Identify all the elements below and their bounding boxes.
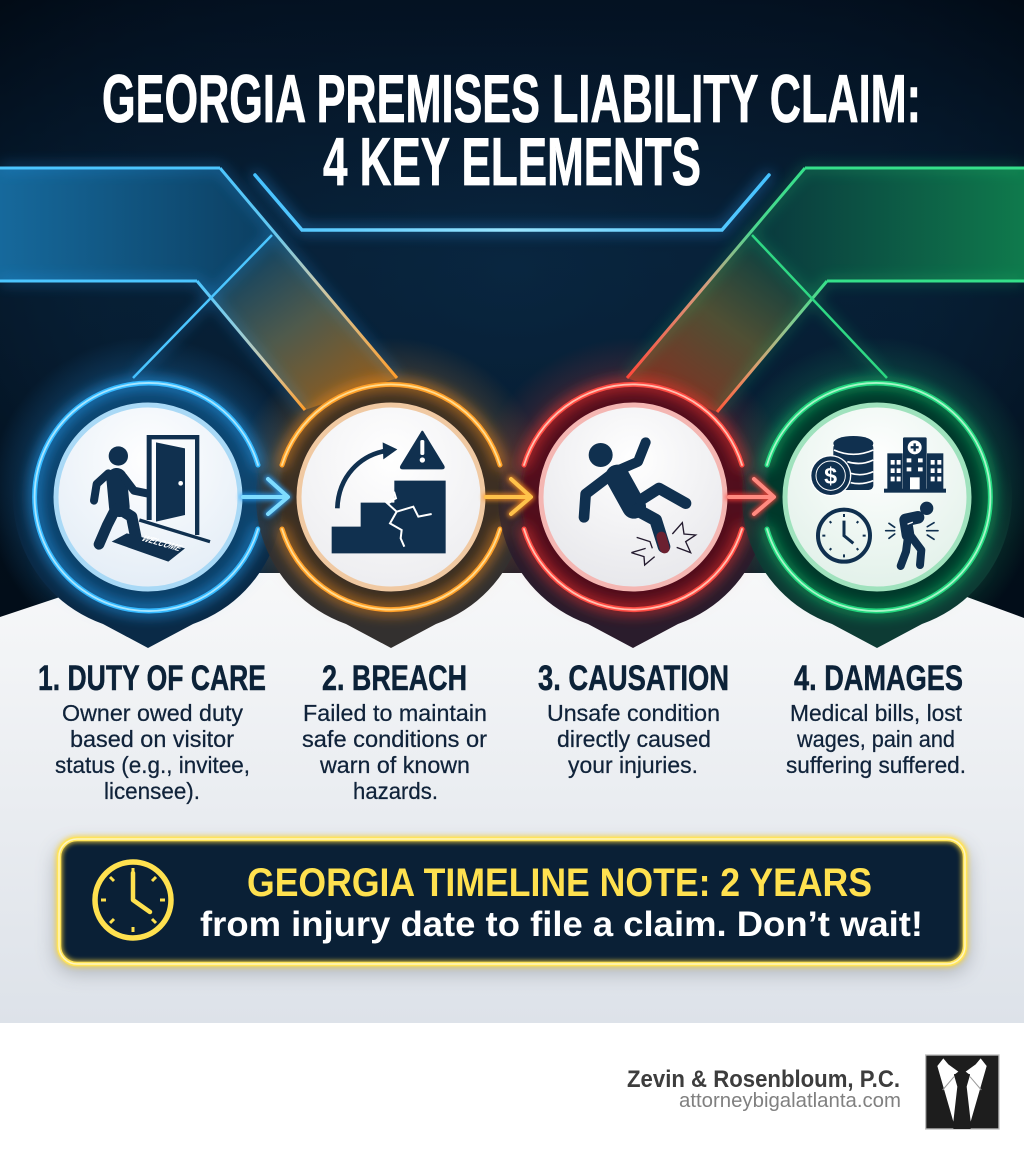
text block: 1 duty of care: 1. DUTY OF CARE — [38, 659, 266, 698]
icon: warning sign and cracked stairs — [332, 432, 446, 553]
disc — [56, 405, 240, 589]
centre neon connector — [255, 175, 769, 230]
icon: person entering door over welcome mat: WELCOME — [138, 534, 185, 553]
disc — [541, 405, 725, 589]
text block: 3 causation: your injuries. — [568, 752, 698, 778]
text block: 2 breach: safe conditions or — [302, 726, 487, 752]
text block: 1 duty of care: licensee). — [104, 778, 200, 804]
text block: 3 causation: 3. CAUSATION — [538, 659, 729, 698]
disc — [785, 405, 969, 589]
text block: 1 duty of care: Owner owed duty — [62, 700, 243, 726]
panel: damages badge — [742, 362, 1012, 648]
badge shadows — [40, 560, 985, 614]
text block: 4 damages: 4. DAMAGES — [794, 659, 963, 698]
dark background — [0, 0, 1024, 657]
icon: suit and tie logo — [926, 1055, 999, 1129]
neon ring — [767, 383, 990, 611]
arrow: causation to damages — [729, 479, 774, 514]
neon ring — [282, 384, 500, 610]
panel: breach badge — [256, 362, 526, 648]
callout: timeline note — [56, 839, 968, 972]
icon: person entering door over welcome mat — [94, 435, 210, 562]
disc — [299, 405, 483, 589]
right green connector band — [627, 168, 1024, 412]
text block: 4 damages — [786, 659, 966, 778]
left blue connector band — [0, 168, 397, 410]
note text — [200, 861, 923, 944]
title — [102, 61, 921, 200]
panel: causation badge — [498, 362, 768, 648]
note text: GEORGIA TIMELINE NOTE: 2 YEARS — [247, 861, 872, 905]
arrow: duty to breach — [243, 479, 288, 514]
injured person — [886, 502, 938, 566]
neon ring — [524, 384, 742, 610]
text block: 2 breach — [302, 659, 487, 804]
text block: 3 causation: Unsafe condition — [547, 700, 720, 726]
text block: 4 damages: suffering suffered. — [786, 752, 966, 778]
text block: 1 duty of care: based on visitor — [70, 726, 234, 752]
light lower panel — [0, 573, 1024, 1023]
footer firm name and website: attorneybigalatlanta.com — [679, 1090, 901, 1112]
white footer strip — [0, 1023, 1024, 1154]
footer firm name and website — [627, 1066, 901, 1112]
note text: from injury date to file a claim. Don’t wait! — [200, 905, 923, 944]
panel: duty of care badge — [13, 362, 283, 648]
arrow: breach to causation — [486, 479, 531, 514]
text block: 2 breach: warn of known — [319, 752, 470, 778]
text block: 4 damages: Medical bills, lost — [790, 700, 962, 726]
text block: 1 duty of care: status (e.g., invitee, — [55, 752, 250, 778]
text block: 1 duty of care — [38, 659, 266, 804]
hospital — [884, 437, 946, 493]
footer firm name and website: Zevin & Rosenbloum, P.C. — [627, 1066, 900, 1093]
coins: $ — [824, 463, 837, 489]
icon: clock — [95, 862, 171, 938]
icon: coins, hospital, clock and injured person — [810, 436, 946, 566]
text block: 3 causation: directly caused — [557, 726, 711, 752]
text block: 2 breach: hazards. — [353, 778, 438, 804]
neon ring — [35, 383, 258, 611]
title: 4 KEY ELEMENTS — [323, 124, 701, 200]
text block: 2 breach: 2. BREACH — [322, 659, 467, 698]
text block: 3 causation — [538, 659, 729, 778]
icon: person slipping and falling — [584, 442, 696, 565]
text block: 4 damages: wages, pain and — [796, 726, 955, 752]
text block: 2 breach: Failed to maintain — [303, 700, 487, 726]
clock — [818, 510, 870, 562]
